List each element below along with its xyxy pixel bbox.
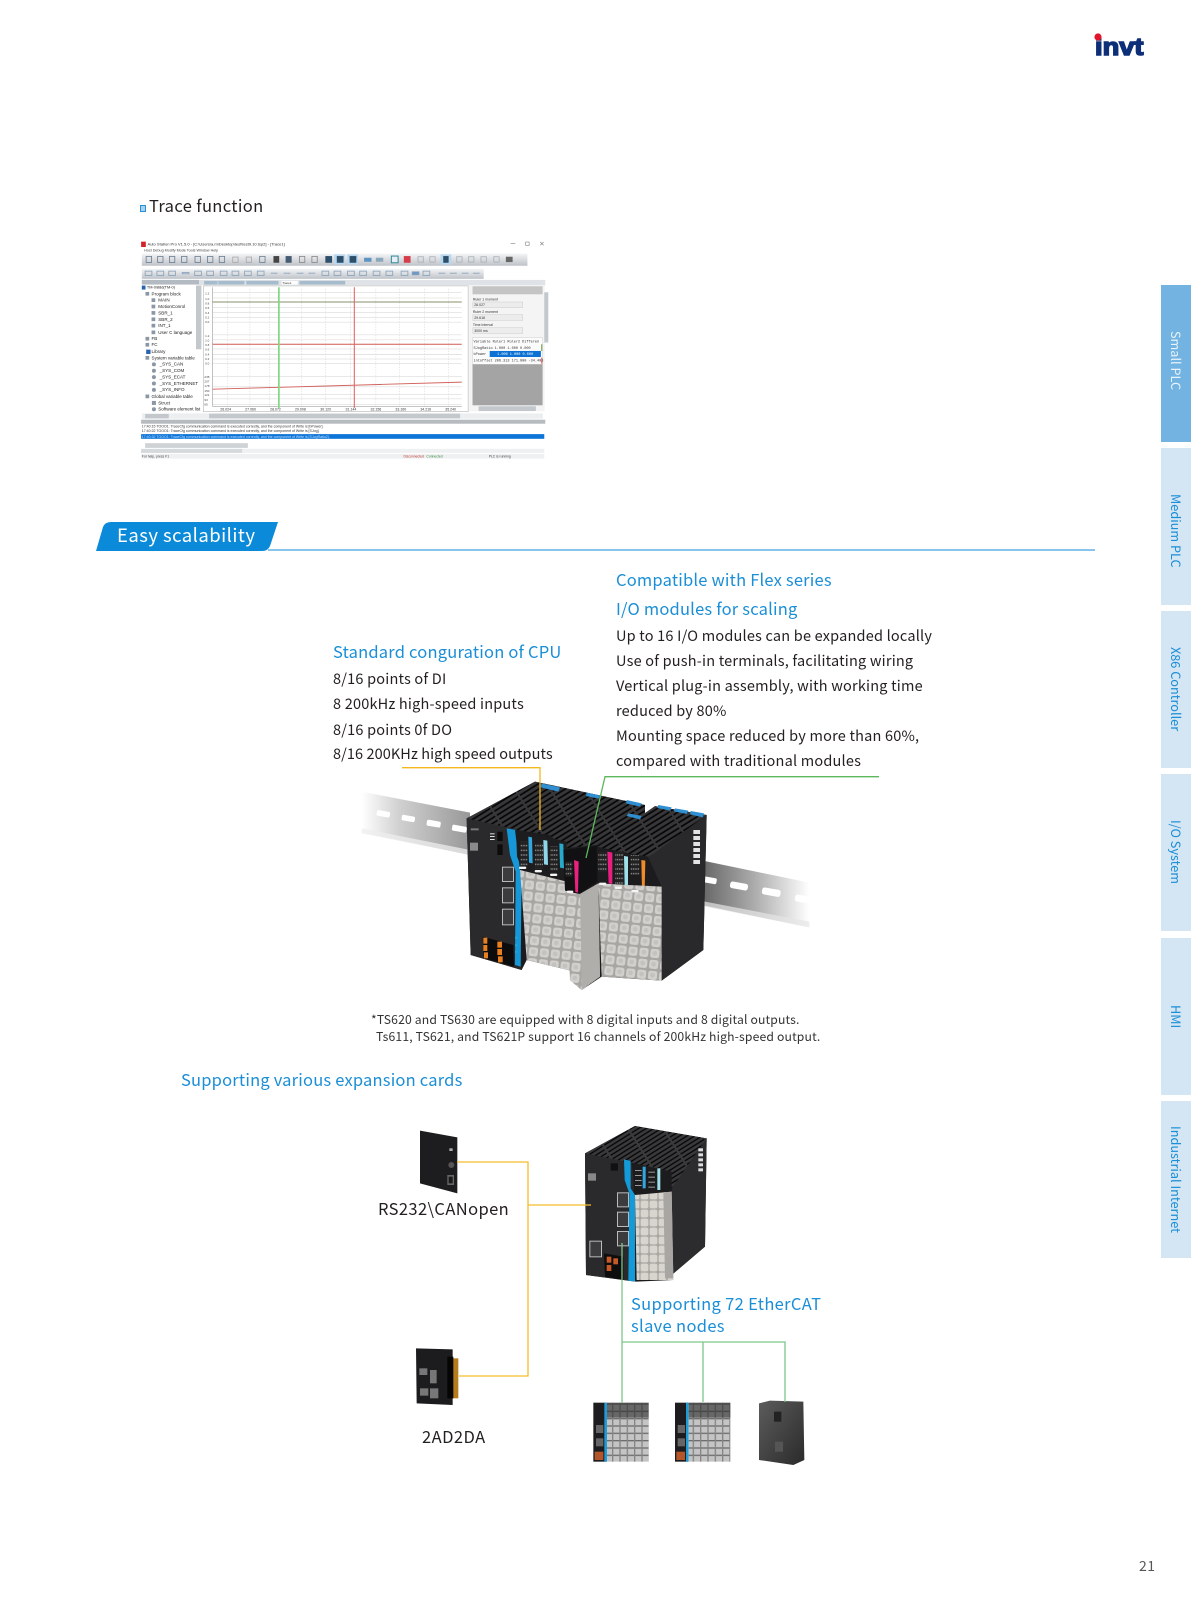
- screenshot: trace software window: FB: [152, 336, 157, 341]
- callout: Flex series I/O modules: Compatible with Flex series: [616, 567, 832, 591]
- screenshot: trace software window: 0.4: [205, 352, 210, 356]
- icon: slave module 2: [675, 1403, 730, 1462]
- screenshot: trace software window: 35.240: [445, 407, 456, 411]
- screenshot: trace software window: 0.8: [205, 343, 210, 347]
- screenshot: trace software window: Ruler 1 moment: [473, 297, 498, 301]
- screenshot: trace software window: _SYS_INFO: [159, 387, 185, 392]
- screenshot: trace software window: Program block: [152, 291, 181, 296]
- screenshot: trace software window: Software element list: [158, 406, 201, 411]
- section heading band: Easy scalability: Easy scalability: [117, 522, 255, 548]
- icon: main PLC: [585, 1126, 707, 1282]
- callout: Flex series I/O modules: reduced by 80%: [616, 700, 727, 721]
- screenshot: trace software window: 32.156: [370, 407, 381, 411]
- diagram: expansion cards and EtherCAT nodes: [416, 1126, 804, 1465]
- screenshot: trace software window: Host Debug Modify Mode Tools Window Help: [144, 249, 218, 253]
- screenshot: trace software window: intoffset 206.313 171.900 -34.403: [474, 358, 543, 363]
- screenshot: trace software window: 1.0: [205, 297, 210, 301]
- icon: slave module 1: [593, 1403, 649, 1462]
- footnote: *TS620 and TS630 are equipped with 8 digital inputs and 8 digital outputs.: [371, 1010, 800, 1028]
- screenshot: trace software window: _SYS_ETHERNET: [159, 381, 198, 386]
- screenshot: trace software window: 0.4: [205, 311, 210, 315]
- screenshot: trace software window: 0.0: [205, 362, 210, 366]
- screenshot: trace software window: 17:40:15 TOOO1: TraceCfg communication command is executed correctly, and the component of Write is [bPower].: [142, 424, 323, 428]
- screenshot: trace software window: PLC is running: [489, 454, 511, 458]
- screenshot: trace software window: 28.072: [270, 407, 281, 411]
- callout: Flex series I/O modules: I/O modules for scaling: [616, 596, 798, 620]
- screenshot: trace software window: 1.2: [205, 292, 210, 296]
- callout: Flex series I/O modules: Mounting space reduced by more than 60%,: [616, 725, 919, 746]
- screenshot: trace software window: 31.144: [346, 407, 356, 411]
- screenshot: trace software window: [141, 242, 548, 458]
- tab: Industrial Internet: [1161, 1101, 1191, 1258]
- screenshot: trace software window: FC: [152, 342, 158, 347]
- tab: X86 Controller: X86 Controller: [1167, 647, 1186, 732]
- tab: IO System: I/O System: [1167, 820, 1186, 884]
- screenshot: trace software window: 29.618: [474, 316, 485, 320]
- section heading band: Easy scalability: [96, 522, 1095, 551]
- callout: standard configuration of CPU: 8/16 200KHz high speed outputs: [333, 743, 553, 764]
- tab: HMI: HMI: [1167, 1005, 1186, 1028]
- screenshot: trace software window: 150: [204, 389, 210, 393]
- screenshot: trace software window: SBR_1: [158, 310, 173, 315]
- screenshot: trace software window: bPower: [474, 352, 486, 357]
- callout: Flex series I/O modules: Use of push-in terminals, facilitating wiring: [616, 650, 913, 671]
- screenshot: trace software window: Ruler 2 moment: [473, 310, 498, 314]
- callout: Flex series I/O modules: compared with traditional modules: [616, 750, 861, 771]
- screenshot: trace software window: TM-0/88d(TM-0): [147, 286, 176, 290]
- screenshot: trace software window: 1.2: [205, 334, 210, 338]
- callout: Flex series I/O modules: [616, 567, 932, 771]
- screenshot: trace software window: INT_1: [158, 323, 171, 328]
- tab: Small PLC: Small PLC: [1167, 331, 1186, 390]
- product image: PLC with IO modules on DIN rail: [362, 782, 810, 990]
- callout: standard configuration of CPU: 8 200kHz high-speed inputs: [333, 693, 524, 714]
- screenshot: trace software window: 65: [204, 403, 208, 407]
- icon: 2AD2DA card: [416, 1348, 458, 1405]
- screenshot: trace software window: 207: [204, 379, 210, 383]
- screenshot: trace software window: 178: [204, 384, 210, 388]
- logo: invt: invt: [1095, 34, 1144, 61]
- page number: 21: [1139, 1556, 1156, 1576]
- label: Supporting 72 EtherCAT: [631, 1291, 821, 1337]
- footnote: Ts611, TS621, and TS621P support 16 channels of 200kHz high-speed output.: [376, 1026, 820, 1044]
- screenshot: trace software window: 26.024: [220, 407, 231, 411]
- screenshot: trace software window: 0.8: [205, 302, 210, 306]
- screenshot: trace software window: 0.6: [205, 348, 210, 352]
- icon: servo drive: [759, 1401, 804, 1465]
- callout: Flex series I/O modules: Vertical plug-in assembly, with working time: [616, 675, 923, 696]
- screenshot: trace software window: 33.160: [395, 407, 406, 411]
- screenshot: trace software window: User C language: [158, 330, 193, 335]
- screenshot: trace software window: _SYS_CAN: [159, 362, 183, 367]
- screenshot: trace software window: Library: [152, 349, 166, 354]
- screenshot: trace software window: Variable Ruler1 Ruler2 Differen: [474, 340, 539, 345]
- screenshot: trace software window: 26.027: [474, 303, 485, 307]
- tab: Medium PLC: Medium PLC: [1167, 494, 1186, 567]
- screenshot: trace software window: Disconnected: [403, 454, 424, 458]
- screenshot: trace software window: _SYS_COM: [159, 368, 185, 373]
- screenshot: trace software window: 0.2: [205, 357, 210, 361]
- screenshot: trace software window: 30.120: [320, 407, 331, 411]
- screenshot: trace software window: 93: [204, 398, 208, 402]
- screenshot: trace software window: Time interval: [473, 323, 493, 327]
- screenshot: trace software window: 1.0: [205, 339, 210, 343]
- screenshot: trace software window: 27.060: [245, 407, 256, 411]
- icon: RS232 CANopen card: [420, 1131, 457, 1193]
- tab: IO System: [1161, 774, 1191, 931]
- label: RS232 CANopen: RS232\CANopen: [378, 1196, 509, 1220]
- tab: X86 Controller: [1161, 611, 1191, 768]
- screenshot: trace software window: 235: [204, 375, 210, 379]
- screenshot: trace software window: SBR_2: [158, 317, 173, 322]
- tab: HMI: [1161, 938, 1191, 1095]
- footnote: [371, 1010, 820, 1044]
- icon: bullet: [140, 205, 146, 212]
- screenshot: trace software window: MotionConrol: [158, 304, 185, 309]
- tab: Industrial Internet: Industrial Internet: [1167, 1126, 1186, 1233]
- screenshot: trace software window: System variable table: [152, 355, 195, 360]
- screenshot: trace software window: Struct: [158, 400, 171, 405]
- callout: standard configuration of CPU: [333, 639, 561, 764]
- label: Supporting 72 EtherCAT: slave nodes: [631, 1313, 725, 1337]
- screenshot: trace software window: _SYS_ECAT: [159, 374, 186, 379]
- callout: standard configuration of CPU: 8/16 points 0f DO: [333, 719, 452, 740]
- subheading: Supporting various expansion cards: Supporting various expansion cards: [181, 1067, 462, 1091]
- screenshot: trace software window: SJogRatio 1.000 1.000 0.000: [474, 346, 531, 351]
- screenshot: trace software window: Trace1: [282, 281, 292, 285]
- label: 2AD2DA: 2AD2DA: [422, 1424, 486, 1448]
- screenshot: trace software window: 0.0: [205, 320, 210, 324]
- callout: standard configuration of CPU: 8/16 points of DI: [333, 668, 446, 689]
- screenshot: trace software window: 17:40:22 TOOO1: TraceCfg communication command is executed correctly, and the component of Write is [SJog].: [142, 429, 320, 433]
- screenshot: trace software window: 121: [204, 393, 210, 397]
- label: Supporting 72 EtherCAT: Supporting 72 EtherCAT: [631, 1291, 821, 1315]
- screenshot: trace software window: 0.6: [205, 306, 210, 310]
- screenshot: trace software window: 29.008: [295, 407, 306, 411]
- screenshot: trace software window: For help, press F1: [142, 454, 169, 458]
- subheading: Trace function: Trace function: [149, 193, 264, 217]
- callout: standard configuration of CPU: Standard conguration of CPU: [333, 639, 561, 663]
- screenshot: trace software window: 1.000 1.000 0.000: [497, 353, 533, 357]
- screenshot: trace software window: Global variable table: [152, 394, 193, 399]
- screenshot: trace software window: MAIN: [158, 298, 170, 303]
- screenshot: trace software window: 3000 ms: [474, 329, 488, 333]
- callout: Flex series I/O modules: Up to 16 I/O modules can be expanded locally: [616, 625, 932, 646]
- screenshot: trace software window: 0.2: [205, 315, 210, 319]
- screenshot: trace software window: 34.216: [420, 407, 431, 411]
- tab: Small PLC: [1161, 285, 1191, 442]
- screenshot: trace software window: 17:40:32 TOOO1: TraceCfg communication command is executed correctly, and the component of Write is [SJogRatio2].: [142, 435, 330, 439]
- tab: Medium PLC: [1161, 448, 1191, 605]
- screenshot: trace software window: Auto Station Pro V1.5.0 - [C:\Users\a.m\Desktop\test\test9.10.tsp2] - [Trace1]: [148, 242, 285, 247]
- screenshot: trace software window: Connected: [426, 454, 443, 458]
